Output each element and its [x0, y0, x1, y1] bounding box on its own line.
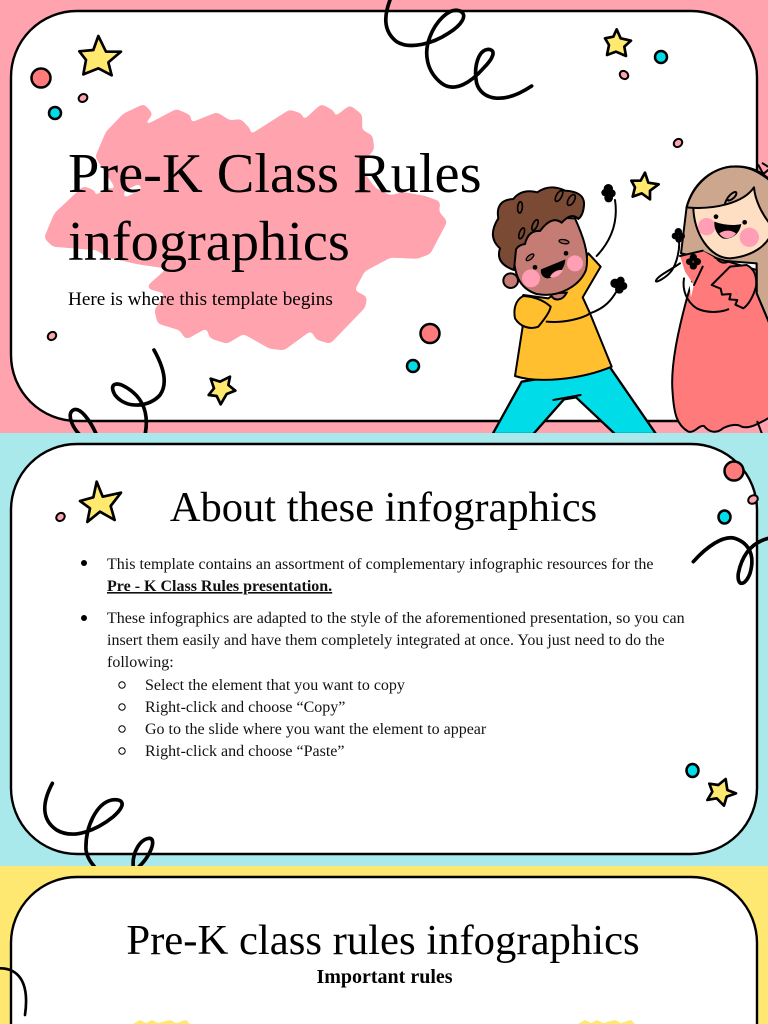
- white rounded card: [11, 444, 757, 854]
- girl fringe: [687, 167, 768, 224]
- boy hair curls: [517, 189, 577, 239]
- girl face details: [698, 192, 759, 247]
- star near children: [631, 173, 659, 199]
- scribble bottom left: [70, 350, 164, 435]
- star left: [80, 482, 121, 522]
- bullet list: [81, 556, 685, 760]
- bullet list: following:: [107, 654, 174, 671]
- bullet list: Go to the slide where you want the element to appear: [145, 721, 487, 738]
- star top right: [605, 29, 631, 56]
- girl arm: [684, 267, 728, 312]
- girl hands: [672, 228, 701, 270]
- boy shoulder sleeve: [514, 296, 551, 328]
- girl hair back: [681, 166, 768, 325]
- illustration: girl: [656, 163, 768, 433]
- bullet list: Pre - K Class Rules presentation.: [107, 578, 332, 595]
- boy cheeks: [522, 269, 540, 287]
- heading: About these infographics: [170, 484, 597, 531]
- cyan background: [0, 433, 768, 866]
- girl right sleeve: [712, 265, 756, 308]
- bullet list: Select the element that you want to copy: [145, 677, 405, 694]
- girl chest gap: [690, 282, 694, 297]
- dots top left: [32, 68, 89, 119]
- subtitle: Here is where this template begins: [68, 289, 333, 310]
- yellow scribble right top: [578, 1020, 635, 1024]
- boy crotch line: [553, 395, 581, 400]
- boy shirt: [515, 253, 612, 380]
- girl dress: [672, 252, 768, 432]
- girl face: [693, 187, 768, 258]
- dots bottom: [46, 324, 439, 372]
- scribble top: [386, 0, 532, 98]
- cyan dot and star bottom right: [686, 764, 736, 806]
- white rounded card: [11, 11, 757, 421]
- girl ribbon line: [656, 240, 680, 282]
- boy hair: [493, 187, 584, 270]
- heading: Pre-K class rules infographics: [126, 917, 640, 964]
- slide 1: title: [0, 0, 768, 435]
- bullet list: insert them easily and have them completely integrated at once. You just need to do the: [107, 632, 665, 649]
- yellow scribble left top: [133, 1020, 190, 1024]
- pink background: [0, 0, 768, 433]
- slide 2: about: [0, 433, 768, 867]
- star bottom left: [209, 377, 235, 404]
- girl sleeve top edge: [680, 251, 728, 263]
- bullet list: This template contains an assortment of complementary infographic resources for the: [107, 556, 653, 573]
- boy arm line: [547, 313, 590, 322]
- bullet list: Right-click and choose “Copy”: [145, 699, 345, 716]
- boy head: [493, 187, 587, 300]
- yellow background: [0, 866, 768, 1024]
- title: Pre-K Class Rules: [68, 143, 482, 205]
- pink dot left: [55, 511, 66, 523]
- boy arms: [590, 200, 617, 313]
- star top left: [79, 36, 121, 75]
- white rounded card: [11, 877, 757, 1024]
- dots top right: [618, 51, 684, 149]
- illustration: boy: [493, 184, 656, 434]
- girl bow: [758, 163, 768, 174]
- slide 3: rules: [0, 866, 768, 1024]
- dots top right: [718, 462, 759, 524]
- scribble left: [0, 968, 26, 1015]
- bullet list: These infographics are adapted to the style of the aforementioned presentation, so you can: [107, 610, 685, 627]
- bullet list: Right-click and choose “Paste”: [145, 743, 344, 760]
- subheading: Important rules: [316, 966, 453, 988]
- pink brush scribble: [47, 107, 444, 347]
- title line 2: infographics: [68, 211, 350, 273]
- girl legs: [757, 422, 762, 433]
- boy pants: [493, 367, 656, 434]
- scribble bottom left: [45, 783, 153, 867]
- boy eyebrows: [525, 239, 569, 262]
- boy eyes and mouth: [533, 265, 537, 270]
- girl left sleeve: [680, 251, 714, 284]
- boy hands: [601, 184, 627, 294]
- scribble right: [693, 538, 768, 583]
